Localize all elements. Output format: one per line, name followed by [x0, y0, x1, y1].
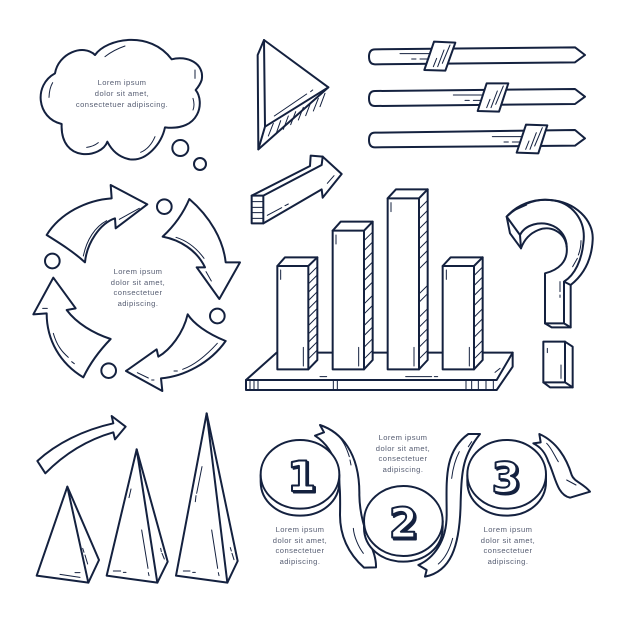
circular arrows text: adipiscing.	[118, 299, 158, 308]
slider 2	[369, 83, 585, 112]
play triangle icon	[258, 40, 328, 149]
cloud text block: dolor sit amet,	[95, 89, 149, 98]
thought bubble large	[172, 140, 188, 156]
bar chart	[246, 189, 513, 390]
step 2 text	[376, 433, 430, 474]
step 1 text: dolor sit amet,	[273, 536, 327, 545]
step 3 text: adipiscing.	[488, 557, 528, 566]
circular arrows text: Lorem ipsum	[114, 267, 162, 276]
step 1 text: adipiscing.	[280, 557, 320, 566]
thought cloud	[41, 40, 206, 170]
numbered steps	[261, 425, 590, 577]
pyramid small	[37, 487, 99, 583]
cloud text block: Lorem ipsum	[98, 78, 146, 87]
arrow right	[163, 199, 240, 299]
step 2 text: dolor sit amet,	[376, 444, 430, 453]
step 2 text: adipiscing.	[383, 465, 423, 474]
step 2 disc: 2	[389, 499, 418, 548]
pyramid large	[176, 413, 238, 583]
step 2 text: Lorem ipsum	[379, 433, 427, 442]
pyramids	[37, 413, 238, 583]
step 1 disc: 1	[287, 452, 316, 501]
sliders	[369, 42, 585, 153]
step 3 disc	[467, 440, 546, 516]
circular arrows text: dolor sit amet,	[111, 278, 165, 287]
ribbon 3	[533, 434, 590, 498]
circular arrows text: consectetuer	[114, 288, 162, 297]
step 1 text: Lorem ipsum	[276, 525, 324, 534]
slider 3	[369, 125, 585, 153]
chart base platform	[246, 353, 513, 390]
step 3 text: dolor sit amet,	[481, 536, 535, 545]
step 1 disc	[261, 440, 339, 516]
curved arrow over pyramids	[37, 416, 126, 473]
cloud text block	[76, 78, 168, 109]
step 3 disc: 3	[491, 453, 520, 502]
cloud text block: consectetuer adipiscing.	[76, 100, 168, 109]
bar 3	[388, 189, 428, 369]
step 2 disc	[364, 486, 443, 562]
step 3 text: Lorem ipsum	[484, 525, 532, 534]
step 1 text: consectetuer	[276, 546, 324, 555]
step 3 text: consectetuer	[484, 546, 532, 555]
question mark	[507, 200, 593, 387]
bar 4	[443, 257, 483, 369]
step 2 text: consectetuer	[379, 454, 427, 463]
ribbon 2	[418, 434, 480, 577]
ribbon 1	[315, 425, 376, 568]
step 2 disc: 2	[390, 500, 419, 549]
connector dots	[45, 199, 225, 378]
pyramid medium	[107, 449, 168, 583]
step 1 disc: 1	[289, 454, 318, 503]
step 1 text	[273, 525, 327, 566]
question mark dot	[543, 342, 573, 387]
step 3 text	[481, 525, 535, 566]
circular arrows text	[111, 267, 165, 308]
step 3 disc: 3	[493, 455, 522, 504]
arrow left	[33, 278, 111, 377]
slider 1	[369, 42, 585, 71]
arrow top	[47, 185, 147, 262]
bar 1	[277, 257, 317, 369]
circular arrows	[33, 185, 240, 391]
arrow bottom	[126, 314, 226, 391]
bar 2	[333, 222, 373, 369]
3D arrow	[252, 156, 342, 223]
thought bubble small	[194, 158, 206, 170]
